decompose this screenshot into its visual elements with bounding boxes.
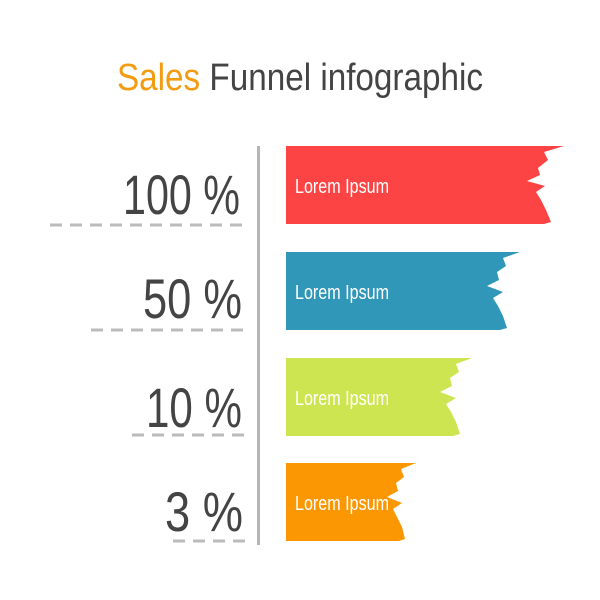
vertical axis line xyxy=(257,146,260,545)
bar: blue 50% xyxy=(286,252,520,330)
bar: orange 3% xyxy=(286,463,416,541)
bar: blue 50%: Lorem Ipsum xyxy=(295,282,389,304)
bar: red 100% xyxy=(286,146,564,224)
label: 50 %: 50 % xyxy=(143,267,242,330)
label: 3 %: 3 % xyxy=(165,480,243,543)
bar: green 10%: Lorem Ipsum xyxy=(295,388,389,410)
bar: green 10% xyxy=(286,358,472,436)
label: 10 %: 10 % xyxy=(146,376,242,439)
label: 100 %: 100 % xyxy=(123,163,240,226)
bar: red 100%: Lorem Ipsum xyxy=(295,176,389,198)
title: Sales Funnel infographic xyxy=(117,57,483,99)
bar: orange 3%: Lorem Ipsum xyxy=(295,493,389,515)
